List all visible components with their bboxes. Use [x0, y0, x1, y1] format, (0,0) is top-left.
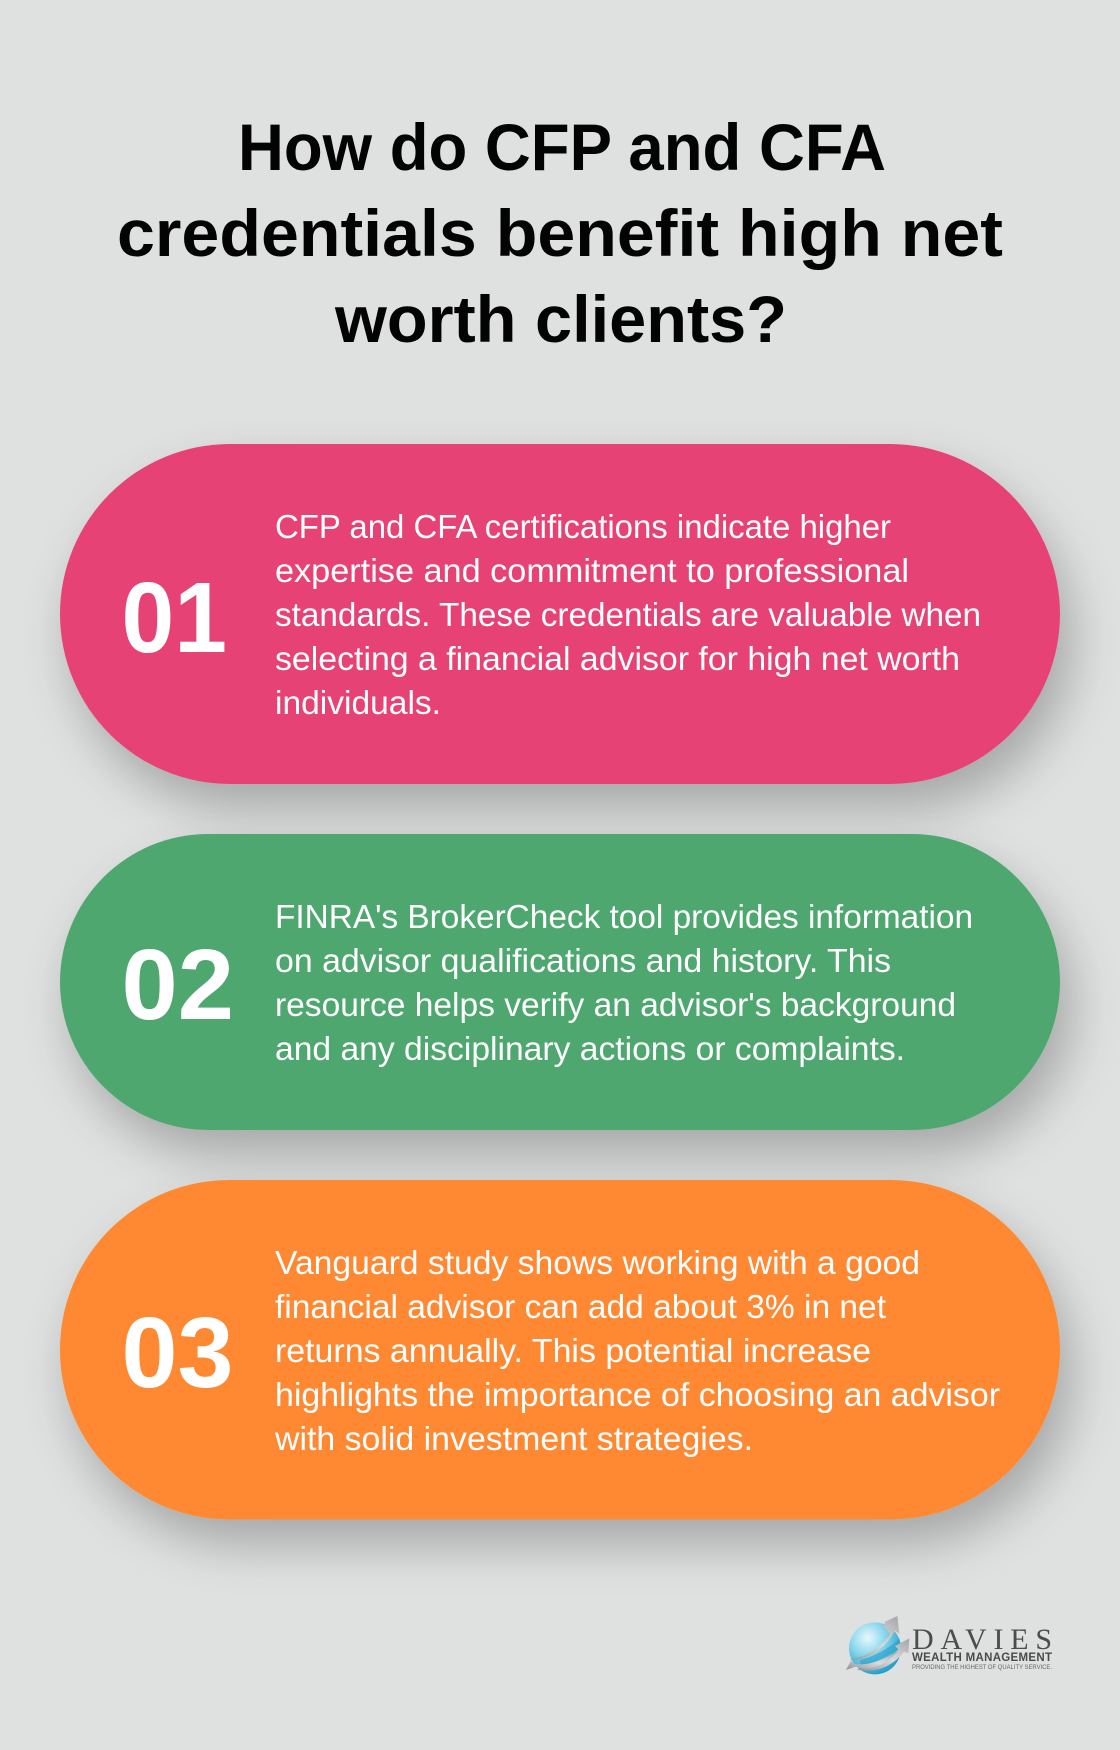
logo subtitle: WEALTH MANAGEMENT [912, 1652, 1052, 1664]
number 01: 01 [122, 562, 227, 674]
text block 01: individuals. [275, 684, 441, 721]
text block 01 [275, 508, 981, 721]
panel: step 03 [60, 1180, 1060, 1520]
title: How do CFP and CFA [238, 110, 886, 184]
pill background orange [60, 1180, 1060, 1520]
text block 03: financial advisor can add about 3% in net [275, 1288, 886, 1325]
text block 01: expertise and commitment to professional [275, 552, 909, 589]
number 02: 02 [122, 929, 234, 1041]
text block 02: on advisor qualifications and history. This [275, 942, 891, 979]
title: credentials benefit high net [117, 196, 1003, 270]
text block 03 [274, 1244, 1000, 1457]
icon: globe with arrows [846, 1616, 909, 1674]
text block 03: returns annually. This potential increase [275, 1332, 871, 1369]
text block 01: standards. These credentials are valuable when [275, 596, 981, 633]
text block 02 [275, 898, 973, 1067]
text block 02: FINRA's BrokerCheck tool provides information [275, 898, 973, 935]
number 03: 03 [122, 1297, 234, 1409]
text block 03: Vanguard study shows working with a good [275, 1244, 920, 1281]
pill background green [60, 834, 1060, 1130]
logo wordmark: DAVIES [912, 1623, 1052, 1656]
title: worth clients? [334, 282, 787, 356]
logo tagline: PROVIDING THE HIGHEST OF QUALITY SERVICE. [912, 1664, 1052, 1671]
pill background pink [60, 444, 1060, 784]
text block 01: CFP and CFA certifications indicate higher [275, 508, 891, 545]
text block 02: and any disciplinary actions or complaints. [275, 1030, 905, 1067]
logo: Davies Wealth Management [846, 1616, 1052, 1674]
panel: step 02 [60, 834, 1060, 1130]
text block 03: highlights the importance of choosing an advisor [275, 1376, 1000, 1413]
text block 01: selecting a financial advisor for high net worth [275, 640, 960, 677]
panel: step 01 [60, 444, 1060, 784]
text block 03: with solid investment strategies. [274, 1420, 753, 1457]
text block 02: resource helps verify an advisor's background [275, 986, 956, 1023]
title [117, 110, 1003, 356]
